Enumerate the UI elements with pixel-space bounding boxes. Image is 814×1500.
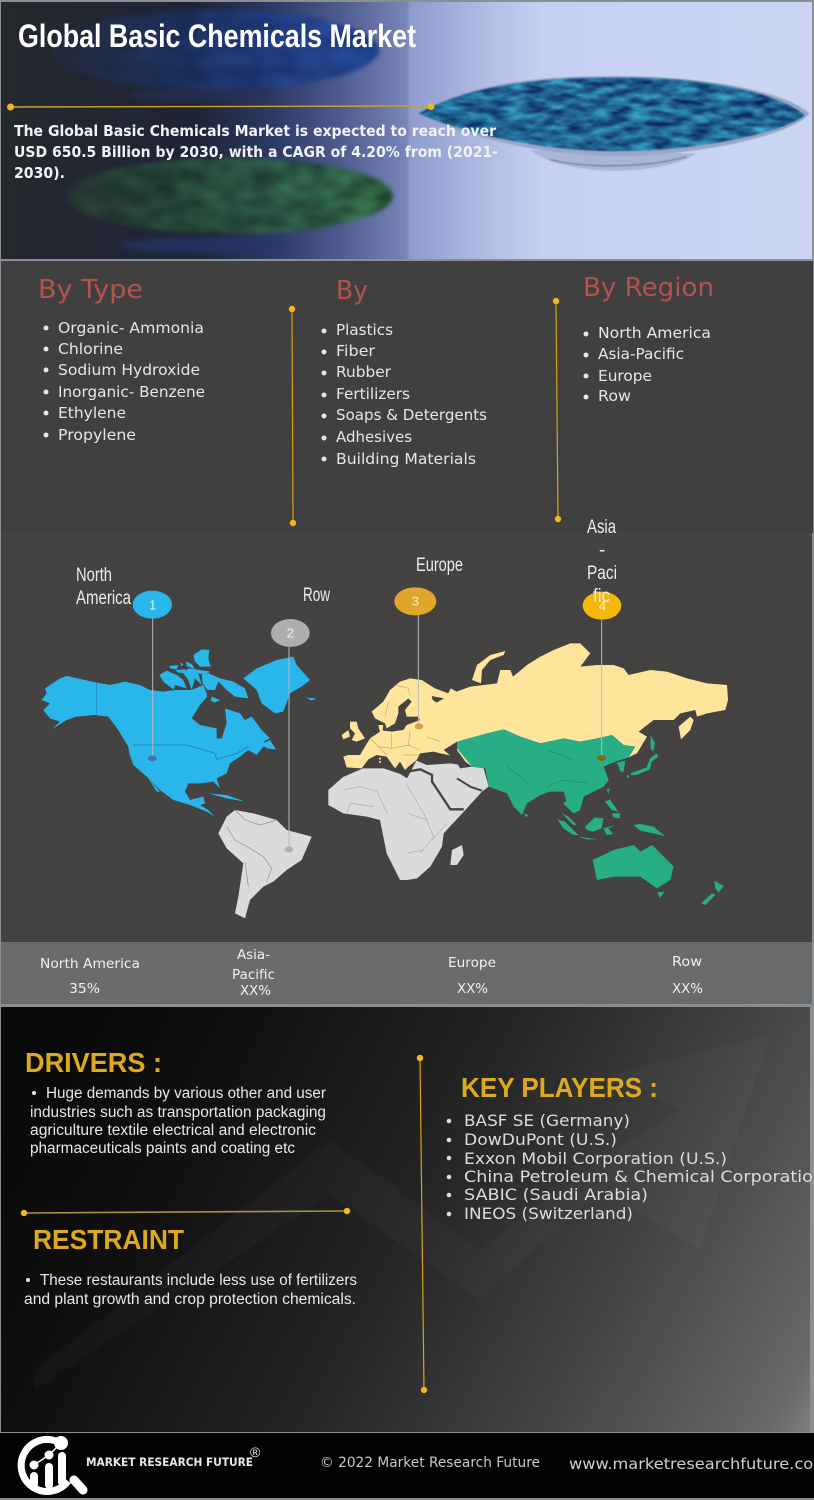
key players: SABIC (Saudi Arabia) [464, 1185, 648, 1204]
restraint: These restaurants include less use of fertilizers [40, 1272, 357, 1289]
panel: footer [0, 1433, 814, 1498]
share: europe [448, 955, 496, 997]
region: australia and new zealand [593, 845, 724, 905]
segment: by region [583, 273, 714, 405]
callout 4: asia pacific: 4 [599, 598, 607, 613]
divider: drivers and restraint [21, 1208, 350, 1216]
share: row [672, 954, 703, 997]
panel: drivers, restraint, key players [1, 1007, 814, 1432]
callout 4: asia pacific [583, 592, 621, 761]
map label: north america [76, 565, 131, 609]
market summary text [14, 122, 498, 182]
callout 1: north america: 1 [149, 597, 156, 612]
segment: by type [38, 275, 205, 444]
brand name: MARKET RESEARCH FUTURE [86, 1455, 253, 1469]
title: Global Basic Chemicals Market [18, 18, 416, 54]
callout 1: north america [133, 591, 172, 761]
logo: market research future [21, 1436, 83, 1491]
map label: asia pacific: Paci [587, 563, 617, 584]
region: north america [42, 649, 317, 817]
segment: by application [322, 276, 487, 468]
segment: by application: Fertilizers [336, 385, 410, 403]
image: faded green dish [67, 158, 393, 253]
map label: asia pacific: fic [593, 586, 610, 607]
callout 2: row [271, 619, 310, 852]
divider: type and application [289, 306, 296, 526]
callout 2: row: 2 [287, 626, 294, 641]
segment: by type: Sodium Hydroxide [58, 361, 200, 379]
segment: by region: Europe [598, 367, 652, 385]
restraint [24, 1224, 357, 1308]
market summary text: 2030). [14, 164, 65, 182]
divider line with end dots [7, 103, 434, 110]
key players: INEOS (Switzerland) [464, 1204, 633, 1223]
region: europe [342, 678, 500, 770]
drivers [25, 1047, 326, 1157]
key players: BASF SE (Germany) [464, 1111, 630, 1130]
drivers: pharmaceuticals paints and coating etc [30, 1140, 295, 1157]
segment: by application: Building Materials [336, 450, 476, 468]
share: north america [40, 956, 140, 997]
segment: by type: Inorganic- Benzene [58, 383, 205, 401]
segment: by application: By [336, 276, 368, 306]
market summary text: The Global Basic Chemicals Market is expected to reach over [14, 122, 497, 140]
divider: application and region [553, 298, 561, 522]
image: faded blue dish [51, 10, 379, 102]
segment: by type: Propylene [58, 426, 136, 444]
share: north america: North America [40, 956, 140, 972]
map label: europe: Europe [416, 555, 463, 576]
region: africa and middle east [328, 742, 489, 880]
share: europe: XX% [457, 981, 488, 997]
share: row: Row [672, 954, 702, 970]
vertical divider [417, 1055, 427, 1393]
segment: by application: Rubber [336, 363, 392, 381]
segment: by application: Plastics [336, 321, 393, 339]
segment: by application: Fiber [336, 342, 376, 360]
map label: north america: America [76, 588, 131, 609]
share: row: XX% [672, 981, 703, 997]
region: russia [424, 643, 728, 757]
segment: by region: Asia-Pacific [598, 345, 684, 363]
region: asia [457, 729, 635, 817]
registered mark: ® [250, 1444, 261, 1460]
drivers: DRIVERS : [25, 1047, 162, 1078]
market summary text: USD 650.5 Billion by 2030, with a CAGR of 4.20% from (2021- [14, 143, 498, 161]
copyright: © 2022 Market Research Future [320, 1455, 540, 1471]
segment: by type: Ethylene [58, 404, 126, 422]
panel: regional world map [1, 517, 812, 942]
panel: hero banner [1, 2, 812, 259]
map label: row: Row [303, 585, 330, 606]
map label: asia pacific: Asia [587, 517, 616, 538]
panel: regional share table [1, 942, 812, 1004]
segment: by application: Adhesives [336, 428, 412, 446]
share: north america: 35% [69, 981, 100, 997]
key players [447, 1072, 814, 1223]
share: asia pacific [232, 947, 275, 999]
share: asia pacific: Asia- [237, 947, 270, 963]
panel: market segments [1, 261, 813, 533]
segment: by application: Soaps & Detergents [336, 406, 487, 424]
callout 3: europe: 3 [412, 593, 419, 608]
share: asia pacific: XX% [240, 983, 271, 999]
restraint: RESTRAINT [33, 1224, 184, 1255]
map label: asia pacific [587, 517, 617, 607]
segment: by type: By Type [38, 275, 143, 305]
share: europe: Europe [448, 955, 496, 971]
map label: north america: North [76, 565, 112, 586]
key players: DowDuPont (U.S.) [464, 1130, 617, 1149]
website: www.marketresearchfuture.com [569, 1455, 814, 1473]
callout 3: europe [394, 587, 436, 729]
image: dish of blue granules [417, 76, 809, 171]
share: asia pacific: Pacific [232, 967, 275, 983]
region: pacific islands [557, 735, 665, 839]
segment: by region: North America [598, 324, 711, 342]
drivers: industries such as transportation packaging [30, 1104, 326, 1121]
segment: by type: Organic- Ammonia [58, 319, 204, 337]
key players: China Petroleum & Chemical Corporation [464, 1167, 814, 1186]
region: south america [218, 810, 312, 918]
key players: Exxon Mobil Corporation (U.S.) [464, 1149, 727, 1168]
map label: asia pacific: - [599, 540, 605, 561]
restraint: and plant growth and crop protection chemicals. [24, 1291, 356, 1308]
segment: by region: Row [598, 387, 631, 405]
segment: by region: By Region [583, 273, 714, 303]
drivers: Huge demands by various other and user [46, 1085, 326, 1102]
key players: KEY PLAYERS : [461, 1072, 658, 1103]
segment: by type: Chlorine [58, 340, 123, 358]
drivers: agriculture textile electrical and electronic [30, 1122, 316, 1139]
